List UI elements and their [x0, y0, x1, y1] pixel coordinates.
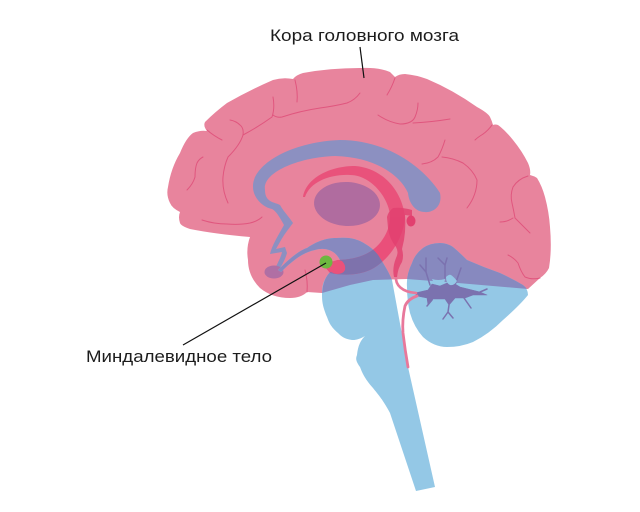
small nucleus: [264, 266, 284, 278]
leader line: amygdala: [183, 263, 326, 345]
hippocampal band: [325, 217, 405, 275]
brainstem over cortex: [278, 238, 392, 293]
cortex folds: [187, 78, 540, 292]
label: amygdala: Миндалевидное тело: [86, 347, 272, 366]
cerebellum: [407, 243, 530, 347]
arbor vitae: [415, 258, 487, 319]
cortex: [167, 68, 551, 298]
small red knob: [406, 216, 416, 226]
brainstem: [278, 238, 435, 491]
band tip: [327, 260, 345, 274]
leader line: cortex: [360, 47, 364, 78]
amygdala: [320, 256, 332, 268]
corpus callosum and thin tract: [253, 140, 441, 278]
thalamus: [313, 180, 381, 228]
cerebellum over cortex: [407, 243, 527, 289]
band over brainstem: [330, 250, 382, 274]
brain diagram: [88, 30, 551, 491]
mammillothalamic tract: [387, 208, 416, 277]
label: cortex: Кора головного мозга: [270, 26, 460, 45]
descending tract: [396, 276, 417, 367]
fornix arc: [303, 166, 405, 217]
